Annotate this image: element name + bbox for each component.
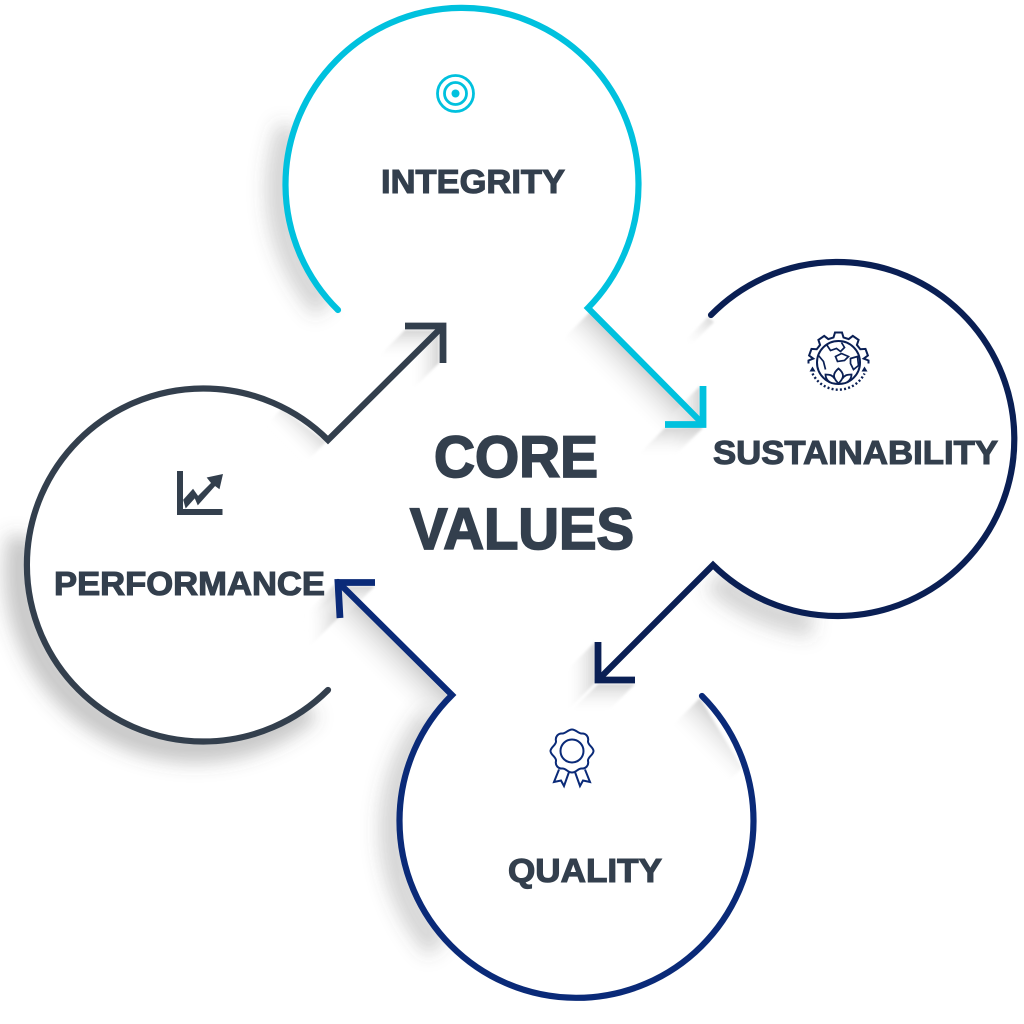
icon: target (438, 76, 474, 112)
soft performance shadow (20, 537, 308, 748)
sustainability arc and arrow (598, 262, 1014, 680)
title (410, 425, 634, 562)
performance arc and arrow (27, 326, 443, 741)
icon: globe with gear (808, 332, 868, 390)
panel: sustainability (598, 262, 1014, 680)
label: integrity: INTEGRITY (381, 163, 565, 200)
panel: quality (338, 582, 753, 998)
soft arc shadows (280, 127, 813, 947)
label: quality: QUALITY (508, 852, 662, 889)
quality arc and arrow (338, 582, 753, 998)
title: CORE (434, 425, 598, 490)
label: sustainability: SUSTAINABILITY (713, 434, 998, 471)
long arrow shadows (262, 312, 742, 798)
panel: performance (27, 326, 443, 741)
title: VALUES (410, 497, 634, 562)
icon: growth chart (177, 471, 222, 515)
label: performance: PERFORMANCE (54, 565, 325, 602)
panel: integrity (286, 8, 703, 425)
integrity arc and arrow (286, 8, 703, 425)
icon: award rosette (550, 730, 594, 786)
